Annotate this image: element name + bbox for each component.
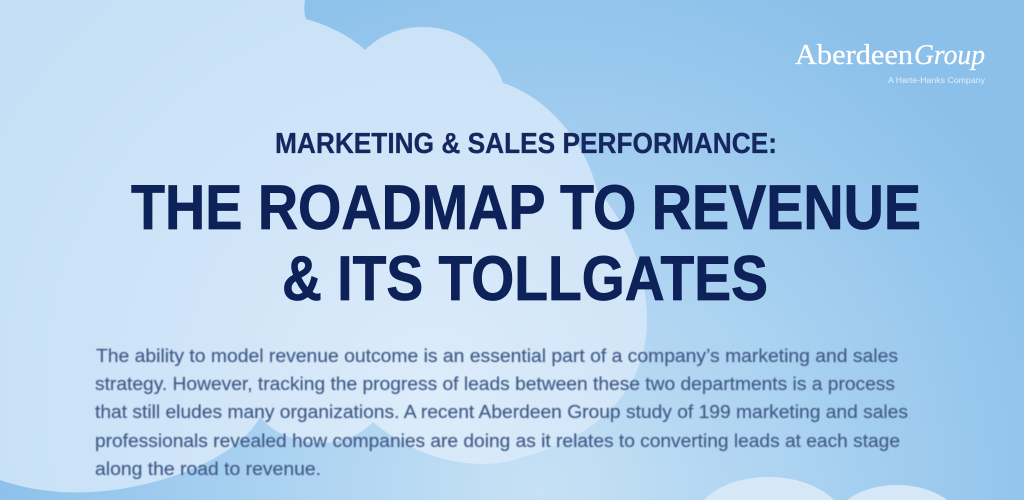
logo: Aberdeen Group: Group: [914, 40, 985, 71]
intro paragraph: that still eludes many organizations. A recent Aberdeen Group study of 199 marketing and sales: [95, 401, 908, 422]
subtitle: MARKETING & SALES PERFORMANCE:: [275, 128, 777, 160]
intro paragraph: along the road to revenue.: [95, 458, 321, 479]
logo: Aberdeen Group: [795, 40, 985, 85]
intro paragraph: professionals revealed how companies are doing as it relates to converting leads at each stage: [95, 430, 900, 451]
intro paragraph: strategy. However, tracking the progress of leads between these two departments is a process: [95, 373, 895, 394]
small bottom clouds: [704, 477, 947, 500]
logo: Aberdeen Group: A Harte-Hanks Company: [888, 76, 985, 85]
main title: [131, 173, 921, 314]
main title: THE ROADMAP TO REVENUE: [131, 173, 921, 243]
large cloud: [0, 0, 647, 492]
intro paragraph: The ability to model revenue outcome is an essential part of a company’s marketing and sales: [96, 345, 898, 366]
logo: Aberdeen Group: Aberdeen: [795, 40, 913, 71]
main title: & ITS TOLLGATES: [282, 244, 768, 314]
intro paragraph: [95, 345, 908, 479]
